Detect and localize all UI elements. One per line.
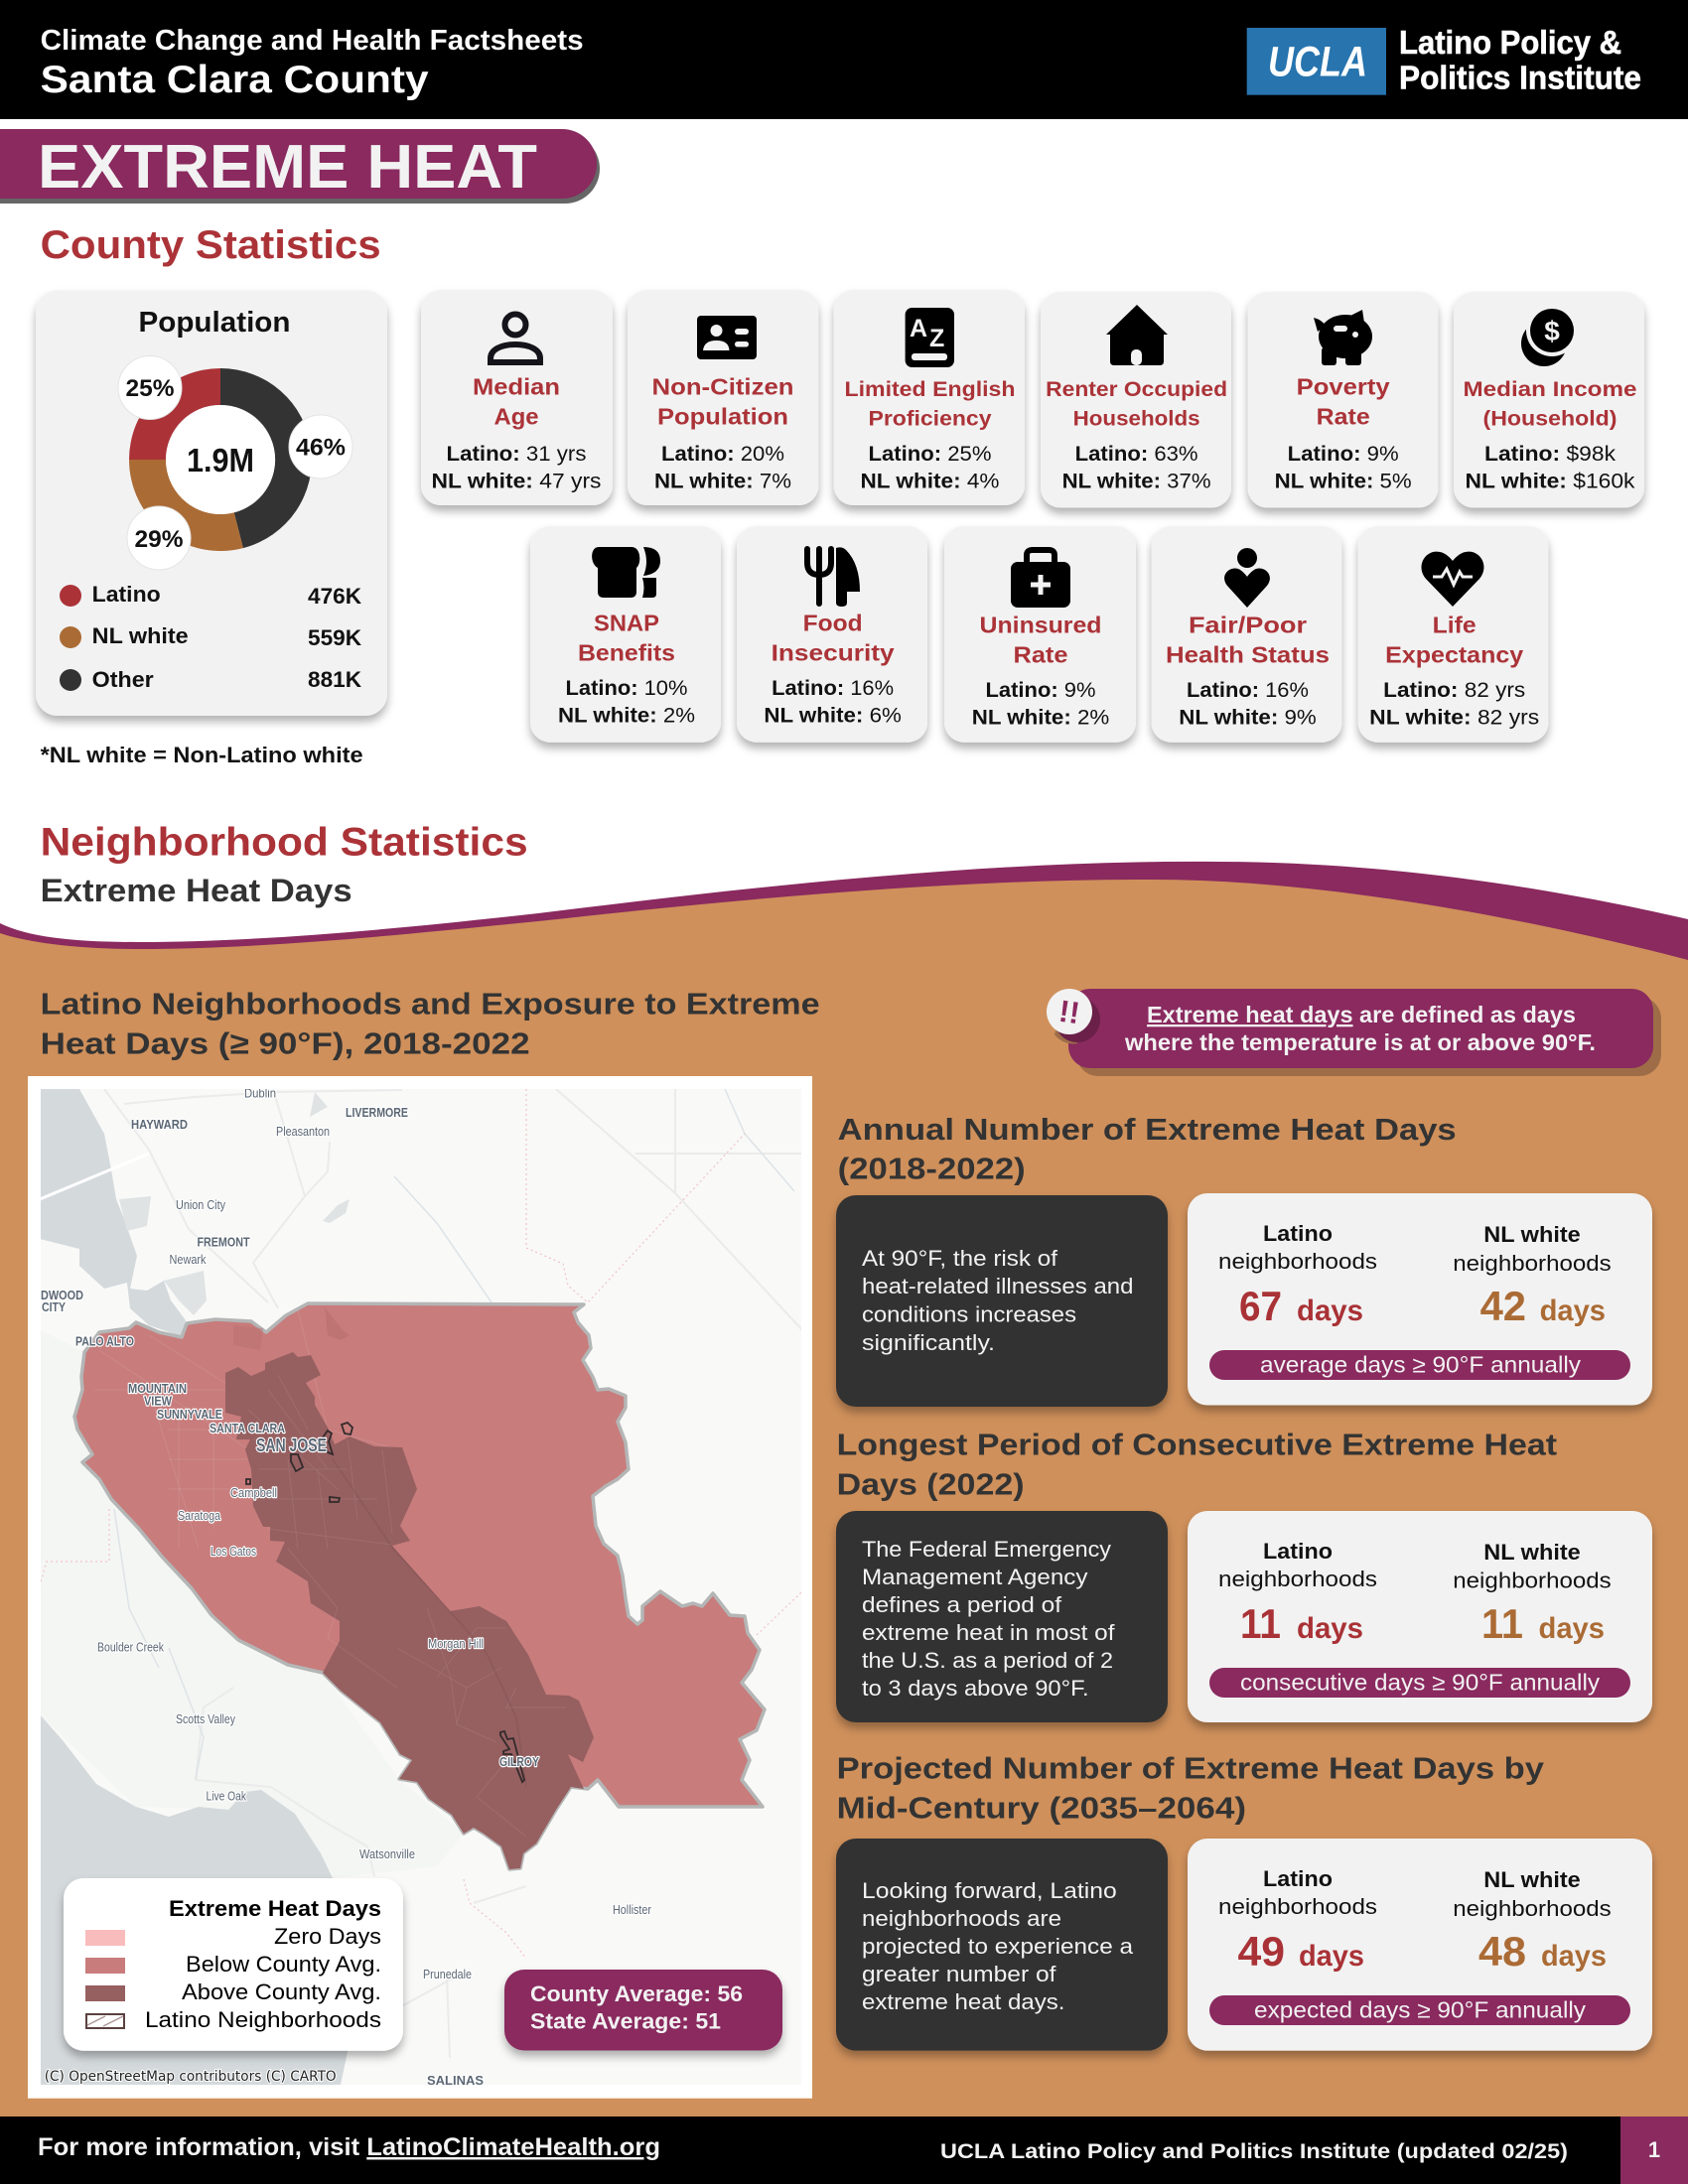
callout: extreme heat days definition: where the temperature is at or above 90°F. [1124,1029,1596,1055]
panel: map [28,1076,812,2099]
card: food insecurity: Latino: 16% [772,677,894,700]
county outline [74,1303,765,1869]
text box: FEMA definition: extreme heat in most of [862,1620,1115,1645]
icon: piggy bank [1314,310,1372,365]
heading: neighborhood statistics: Neighborhood Statistics [41,821,528,865]
card: median age: Age [494,403,538,429]
UCLA logo: UCLA [1268,39,1367,86]
card: poverty rate: Latino: 9% [1288,443,1399,466]
stat card: annual days: average days ≥ 90°F annually [1260,1352,1582,1378]
card: food insecurity: Insecurity [772,640,895,666]
card: median income [1454,292,1644,508]
donut chart: 25% [125,375,175,402]
card: non-citizen population: NL white: 7% [654,471,791,493]
above county average tracts [225,1352,594,1869]
heading: longest period [837,1428,1557,1501]
heading: annual number: Annual Number of Extreme Heat Days [838,1112,1457,1147]
stat card: projected days: NL white [1483,1867,1581,1892]
map place labels: LIVERMORE [346,1105,408,1120]
stat card: consecutive days: days [1297,1612,1363,1645]
map place labels: CITY [42,1299,66,1314]
icon: coin: $ [1544,316,1560,346]
subheading: extreme heat days: Extreme Heat Days [41,873,352,908]
stat card: projected days: neighborhoods [1218,1894,1377,1919]
card: median age: Latino: 31 yrs [447,443,586,466]
UCLA logo: Politics Institute [1399,59,1641,95]
stat card: annual days: 42 [1480,1283,1526,1329]
text box: annual risk: heat-related illnesses and [862,1274,1134,1298]
stat card: projected days: expected days ≥ 90°F annually [1254,1997,1587,2023]
legend: population groups: 476K [308,584,361,609]
map place labels: Prunedale [423,1967,472,1981]
card: median age: NL white: 47 yrs [431,471,602,493]
heading: projected number [837,1751,1545,1825]
card: snap benefits: NL white: 2% [558,704,695,727]
stat card: consecutive days [1188,1511,1652,1722]
map place labels: GILROY [499,1754,539,1769]
icon: heart with pulse [1422,552,1483,607]
stat card: annual days: neighborhoods [1453,1251,1612,1276]
map place labels: Hollister [613,1902,652,1917]
stat card: consecutive days: Latino [1263,1539,1333,1564]
card: median income: NL white: $160k [1466,471,1635,493]
map legend [64,1878,403,2051]
map place labels: VIEW [144,1394,173,1409]
footer link text: For more information, visit LatinoClimateHealth.org [38,2133,660,2161]
text box: annual risk [836,1195,1168,1407]
card: snap benefits [530,526,721,743]
map place labels: Los Gatos [211,1544,256,1559]
card: poverty rate: NL white: 5% [1275,471,1412,493]
callout: extreme heat days definition [1047,989,1661,1076]
icon: bread [592,547,660,598]
donut chart: 1.9M [187,442,254,478]
map place labels: PALO ALTO [75,1334,134,1349]
heading: longest period: Longest Period of Consecutive Extreme Heat [837,1428,1557,1462]
water: pacific and monterey bay [40,1714,348,2085]
card: snap benefits: SNAP [594,611,659,636]
county name: Santa Clara County [41,59,429,101]
map place labels: SAN JOSE [256,1435,327,1455]
heading: longest period: Days (2022) [837,1467,1025,1501]
heading: projected number: Mid-Century (2035–2064) [837,1791,1246,1825]
heading: annual number [838,1112,1457,1185]
card: uninsured rate: NL white: 2% [972,707,1109,730]
callout: county and state average: County Average: 56 [530,1981,743,2006]
card: median age: Median [473,374,560,400]
icon: fork and knife [807,547,860,607]
stat card: projected days: 48 [1478,1928,1526,1975]
card: life expectancy [1358,526,1549,743]
stat card: consecutive days: 11 [1481,1600,1523,1647]
legend: population groups: 881K [308,667,361,692]
map attribution: (C) OpenStreetMap contributors (C) CARTO [45,2069,337,2085]
legend: population groups: Other [92,667,154,692]
map place labels: Scotts Valley [176,1711,235,1726]
stat card: consecutive days: neighborhoods [1453,1569,1612,1593]
stat card: projected days: 49 [1237,1928,1285,1975]
card: limited english proficiency: Proficiency [868,408,992,431]
text box: looking forward [836,1839,1168,2051]
legend: population groups: 559K [308,625,361,650]
latino neighborhoods outlines [246,1423,524,1782]
stat card: annual days [1188,1193,1652,1406]
tract lines [248,1375,566,1837]
map legend: Latino Neighborhoods [145,2007,381,2032]
heading: map title [41,987,820,1061]
text box: FEMA definition [836,1511,1168,1722]
map place labels: Watsonville [359,1846,415,1861]
card: median income: Latino: $98k [1484,443,1617,466]
legend: population groups [60,582,361,692]
card: non-citizen population: Latino: 20% [661,443,784,466]
map place labels: SUNNYVALE [157,1407,222,1422]
stat card: projected days: days [1541,1940,1607,1973]
text box: looking forward: Looking forward, Latino [862,1878,1117,1903]
UCLA logo [1247,24,1641,95]
icon: exclamation marks: !! [1056,994,1082,1030]
map legend: Above County Avg. [182,1979,381,2004]
card: median income: (Household) [1483,408,1617,431]
stat card: projected days: Latino [1263,1866,1333,1891]
card: renter occupied households: Households [1073,408,1200,431]
footnote: *NL white = Non-Latino white [41,743,363,767]
heading: map title: Heat Days (≥ 90°F), 2018-2022 [41,1026,530,1061]
stat card: annual days: NL white [1483,1222,1581,1247]
card: limited english proficiency: NL white: 4% [860,471,999,493]
header series title: Climate Change and Health Factsheets [41,25,584,57]
roads and borders [40,1089,804,2058]
page number [1620,2116,1688,2184]
map place labels: Morgan Hill [428,1636,484,1651]
map legend: Below County Avg. [186,1952,381,1977]
card: fair/poor health status [1152,526,1342,743]
text box: looking forward: extreme heat days. [862,1989,1064,2014]
water: san francisco bay [40,1089,186,1336]
icon: dictionary: A [910,315,927,342]
stat card: annual days: days [1540,1295,1606,1327]
card: non-citizen population: Non-Citizen [651,374,794,400]
legend: population groups: Latino [92,582,161,607]
banner: extreme heat: EXTREME HEAT [38,133,537,202]
stat card: annual days: Latino [1263,1221,1333,1246]
icon: person [491,314,540,362]
card: life expectancy: NL white: 82 yrs [1369,707,1539,730]
page number: 1 [1648,2137,1660,2162]
card: life expectancy: Life [1433,612,1477,637]
card: fair/poor health status: Health Status [1166,641,1330,667]
heading: annual number: (2018-2022) [838,1152,1026,1185]
card: food insecurity [737,526,927,743]
text box: FEMA definition: Management Agency [862,1565,1088,1589]
heading: map title: Latino Neighborhoods and Exposure to Extreme [41,987,820,1022]
map place labels [41,1086,652,2088]
map place labels: Live Oak [207,1788,246,1803]
text box: looking forward: projected to experience a [862,1934,1134,1959]
map legend: Extreme Heat Days [169,1896,381,1921]
text box: FEMA definition: The Federal Emergency [862,1537,1112,1562]
card: snap benefits: Latino: 10% [566,677,687,700]
card: renter occupied households [1041,292,1231,508]
wave: purple swoosh and orange background [0,862,1688,2116]
text box: FEMA definition: defines a period of [862,1592,1062,1617]
UCLA logo: Latino Policy & [1399,24,1621,61]
map place labels: Boulder Creek [97,1640,164,1655]
map place labels: SANTA CLARA [210,1421,286,1435]
card: life expectancy: Latino: 82 yrs [1383,679,1525,702]
legend: population groups: NL white [92,623,189,648]
card: food insecurity: Food [803,611,863,636]
stat card: projected days: neighborhoods [1453,1896,1612,1921]
map place labels: Saratoga [178,1508,221,1523]
card: fair/poor health status: Latino: 16% [1187,679,1309,702]
map place labels: Newark [169,1252,207,1267]
card: limited english proficiency: Latino: 25% [868,443,991,466]
card: food insecurity: NL white: 6% [764,704,902,727]
text box: FEMA definition: to 3 days above 90°F. [862,1676,1089,1701]
icon: first aid kit [1011,550,1070,608]
text box: FEMA definition: the U.S. as a period of 2 [862,1648,1113,1673]
icon: coin [1521,305,1578,366]
water: salt ponds and reservoir [119,1092,350,1315]
map place labels: Pleasanton [276,1124,330,1139]
map place labels: MOUNTAIN [128,1381,187,1396]
callout: county and state average [504,1970,782,2051]
footer credit: UCLA Latino Policy and Politics Institute (updated 02/25) [940,2140,1568,2163]
stat card: consecutive days: neighborhoods [1218,1567,1377,1591]
card: uninsured rate: Latino: 9% [985,679,1096,702]
text box: annual risk: At 90°F, the risk of [862,1246,1058,1271]
map place labels: Union City [176,1197,225,1212]
text box: annual risk: conditions increases [862,1302,1076,1326]
stat card: annual days: neighborhoods [1218,1249,1377,1274]
map legend: Zero Days [274,1924,381,1949]
card: renter occupied households: Latino: 63% [1075,443,1198,466]
callout: county and state average: State Average: 51 [530,2009,721,2033]
card: life expectancy: Expectancy [1385,641,1523,667]
map place labels: SALINAS [427,2073,484,2088]
stat card: annual days: 67 [1239,1283,1282,1329]
donut chart: 46% [296,435,346,461]
card: renter occupied households: NL white: 37% [1062,471,1211,493]
stat card: projected days [1188,1839,1652,2051]
card: non-citizen population [628,290,818,505]
stat card: consecutive days: NL white [1483,1540,1581,1565]
map place labels: FREMONT [197,1235,250,1250]
card: fair/poor health status: Fair/Poor [1189,612,1307,637]
card: non-citizen population: Population [657,403,788,429]
card: uninsured rate: Uninsured [979,612,1102,637]
heading: county statistics: County Statistics [41,223,381,267]
header bar [0,0,1688,119]
card: snap benefits: Benefits [578,640,675,666]
population heading: Population [139,307,290,339]
stat card: projected days: days [1299,1940,1364,1973]
heading: projected number: Projected Number of Extreme Heat Days by [837,1751,1545,1785]
stat card: annual days: days [1297,1295,1363,1327]
card: poverty rate: Poverty [1297,374,1390,400]
text box: looking forward: neighborhoods are [862,1906,1061,1931]
map place labels: Campbell [230,1485,277,1500]
card: uninsured rate [944,526,1136,743]
card: limited english proficiency: Limited English [844,378,1015,401]
stat card: consecutive days: consecutive days ≥ 90°F annually [1240,1670,1601,1696]
card: limited english proficiency [834,290,1025,505]
panel: population [36,290,387,716]
card: median age [421,290,613,505]
stat card: consecutive days: days [1539,1612,1605,1645]
below average tract detail [94,1310,397,1549]
donut chart [118,355,352,570]
map place labels: DWOOD [41,1288,83,1302]
text box: annual risk: significantly. [862,1330,995,1355]
card: poverty rate: Rate [1317,403,1370,429]
icon: id card [697,316,757,359]
icon: person with heart [1224,548,1270,608]
map place labels: HAYWARD [131,1117,188,1132]
callout: extreme heat days definition: Extreme heat days are defined as days [1147,1002,1576,1027]
icon: dictionary [906,308,954,367]
stat card: consecutive days: 11 [1240,1600,1281,1647]
card: median income: Median Income [1464,378,1636,401]
icon: exclamation marks [1047,989,1092,1034]
card: renter occupied households: Renter Occupied [1046,378,1227,401]
footer [0,2116,1688,2184]
map place labels: Dublin [244,1086,276,1100]
card: poverty rate [1247,292,1438,508]
land tint: santa cruz mountains [40,1330,464,1878]
text box: looking forward: greater number of [862,1962,1056,1986]
card: uninsured rate: Rate [1013,641,1068,667]
icon: house [1106,305,1168,365]
donut chart: 29% [135,526,183,553]
card: fair/poor health status: NL white: 9% [1179,707,1317,730]
icon: dictionary: Z [929,325,944,352]
